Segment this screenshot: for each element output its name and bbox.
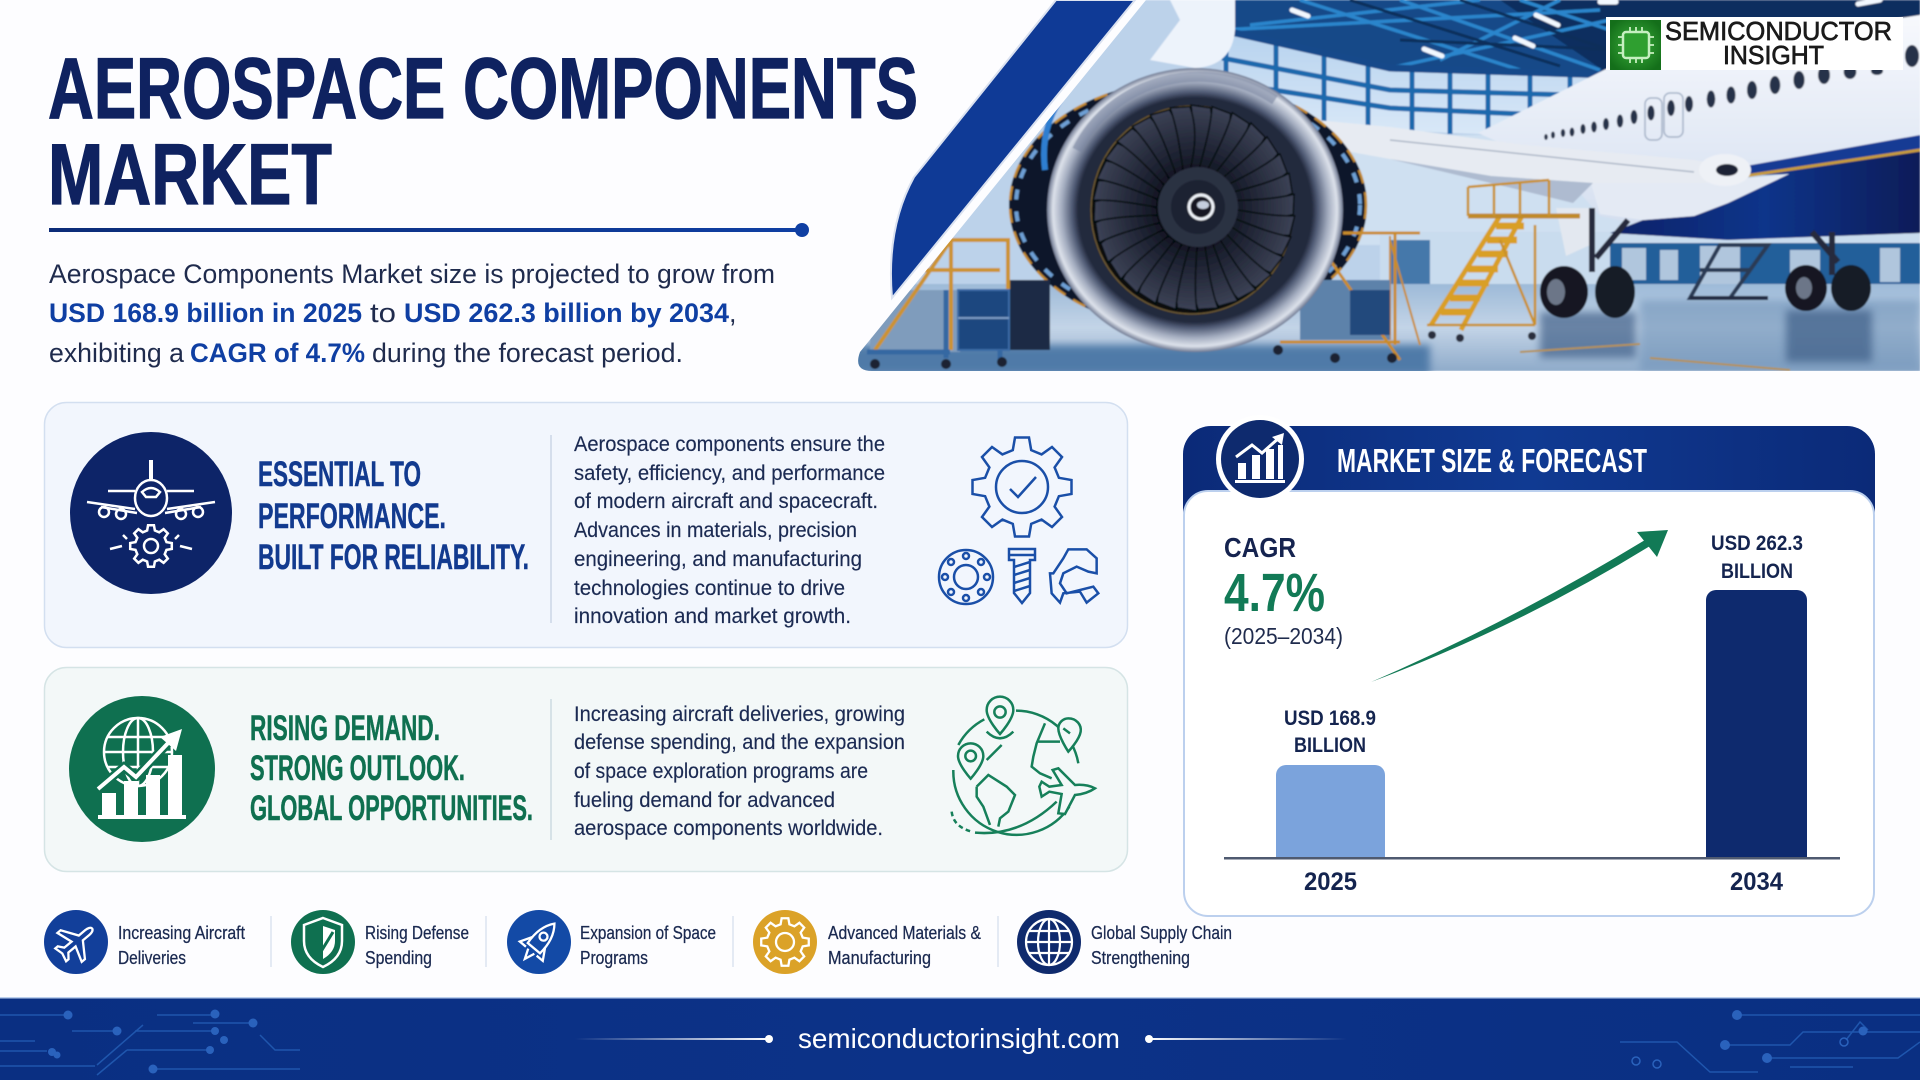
aircraft fuselage (1478, 15, 1920, 240)
driver: increasing aircraft deliveries (44, 910, 245, 974)
panel: market size and forecast (1183, 415, 1875, 916)
driver: global supply chain strengthening: Global Supply Chain (1091, 923, 1232, 943)
description (574, 703, 905, 840)
icon: bolt (1009, 549, 1035, 603)
engine nacelle and fan (1047, 68, 1343, 352)
driver: expansion of space programs (507, 910, 716, 974)
driver: rising defense spending: Spending (365, 948, 432, 968)
driver: advanced materials and manufacturing: Manufacturing (828, 948, 931, 968)
description: safety, efficiency, and performance (574, 462, 885, 485)
CAGR callout: CAGR (1224, 532, 1296, 563)
title: MARKET (48, 127, 332, 223)
panel: essential to performance (44, 402, 1128, 648)
bar chart: 2025 (1304, 868, 1357, 896)
heading (258, 455, 529, 577)
yellow stairs (1390, 180, 1580, 345)
bar chart: USD 262.3 (1711, 532, 1803, 555)
blue diagonal accent (891, 0, 1135, 298)
description: Advances in materials, precision (574, 519, 857, 542)
bar chart: BILLION (1294, 734, 1366, 757)
maintenance carts and scaffolds (867, 233, 1420, 369)
title (48, 41, 918, 223)
wing (1316, 120, 1751, 203)
icon: globe with pins and plane (952, 697, 1095, 835)
description: of modern aircraft and spacecraft. (574, 490, 878, 513)
rear engine frame (1008, 91, 1368, 310)
hero photo: jet engine and aircraft in hangar (850, 0, 1920, 375)
icon: bearing (939, 550, 993, 604)
panel heading: MARKET SIZE & FORECAST (1337, 442, 1647, 479)
bar chart: BILLION (1721, 560, 1793, 583)
driver: rising defense spending (291, 910, 469, 974)
CAGR callout (1224, 532, 1343, 649)
intro paragraph: during the forecast period. (372, 338, 683, 368)
driver: expansion of space programs: Expansion of Space (580, 923, 716, 943)
intro paragraph: CAGR of 4.7% (190, 338, 365, 368)
hangar ceiling (1234, 0, 1920, 72)
heading: PERFORMANCE. (258, 497, 446, 536)
footer band (0, 997, 1920, 1080)
description (574, 433, 885, 628)
floor (850, 284, 1920, 375)
description: Increasing aircraft deliveries, growing (574, 703, 905, 726)
bar chart: 2034 (1730, 868, 1783, 896)
arrow: growth (1371, 530, 1668, 682)
driver: advanced materials and manufacturing: Advanced Materials & (828, 923, 981, 943)
icon: chart badge (1216, 415, 1304, 503)
icon: gear with check (972, 438, 1072, 536)
CAGR callout: (2025–2034) (1224, 623, 1343, 649)
driver: increasing aircraft deliveries: Deliveries (118, 948, 186, 968)
intro paragraph: exhibiting a (49, 338, 185, 368)
cabin windows (1544, 45, 1919, 140)
description: defense spending, and the expansion (574, 731, 905, 754)
logo (1606, 16, 1903, 70)
hangar windows (1222, 30, 1610, 140)
intro paragraph: Aerospace Components Market size is projected to grow from (49, 259, 775, 289)
bar chart (1224, 532, 1840, 896)
logo chip icon (1610, 20, 1661, 70)
driver: rising defense spending: Rising Defense (365, 923, 469, 943)
description: aerospace components worldwide. (574, 817, 883, 840)
description: Aerospace components ensure the (574, 433, 885, 456)
description: of space exploration programs are (574, 760, 868, 783)
white hangar structure (1150, 0, 1235, 68)
bar chart: USD 168.9 (1284, 707, 1376, 730)
panel: rising demand (44, 668, 1128, 872)
heading: GLOBAL OPPORTUNITIES. (250, 789, 533, 828)
driver: global supply chain strengthening: Strengthening (1091, 948, 1190, 968)
heading: RISING DEMAND. (250, 709, 440, 748)
CAGR callout: 4.7% (1224, 563, 1325, 623)
driver: advanced materials and manufacturing (753, 910, 981, 974)
footer website: semiconductorinsight.com (798, 1023, 1120, 1054)
title: AEROSPACE COMPONENTS (48, 41, 918, 137)
intro paragraph (49, 259, 775, 368)
icon: turbine bracket (1050, 549, 1098, 603)
intro paragraph: , (729, 298, 737, 328)
description: technologies continue to drive (574, 577, 845, 600)
driver: expansion of space programs: Programs (580, 948, 648, 968)
landing gear (1540, 208, 1871, 318)
logo: INSIGHT (1723, 40, 1824, 70)
title rule (49, 223, 809, 237)
heading: BUILT FOR RELIABILITY. (258, 538, 529, 577)
description: fueling demand for advanced (574, 789, 835, 812)
heading (250, 709, 533, 828)
shop floor equipment (1380, 232, 1920, 288)
logo: SEMICONDUCTOR (1665, 16, 1892, 46)
intro paragraph: to (370, 298, 396, 328)
heading: STRONG OUTLOOK. (250, 749, 465, 788)
heading: ESSENTIAL TO (258, 455, 421, 494)
icon: aircraft and gear badge (70, 432, 232, 594)
driver: increasing aircraft deliveries: Increasing Aircraft (118, 923, 245, 943)
driver: global supply chain strengthening (1017, 910, 1232, 974)
bright lower hangar (1340, 135, 1640, 245)
intro paragraph: USD 168.9 billion in 2025 (49, 298, 362, 328)
description: engineering, and manufacturing (574, 548, 862, 571)
description: innovation and market growth. (574, 605, 851, 628)
intro paragraph: USD 262.3 billion by 2034 (404, 298, 729, 328)
icon: globe with growth chart badge (69, 696, 215, 842)
